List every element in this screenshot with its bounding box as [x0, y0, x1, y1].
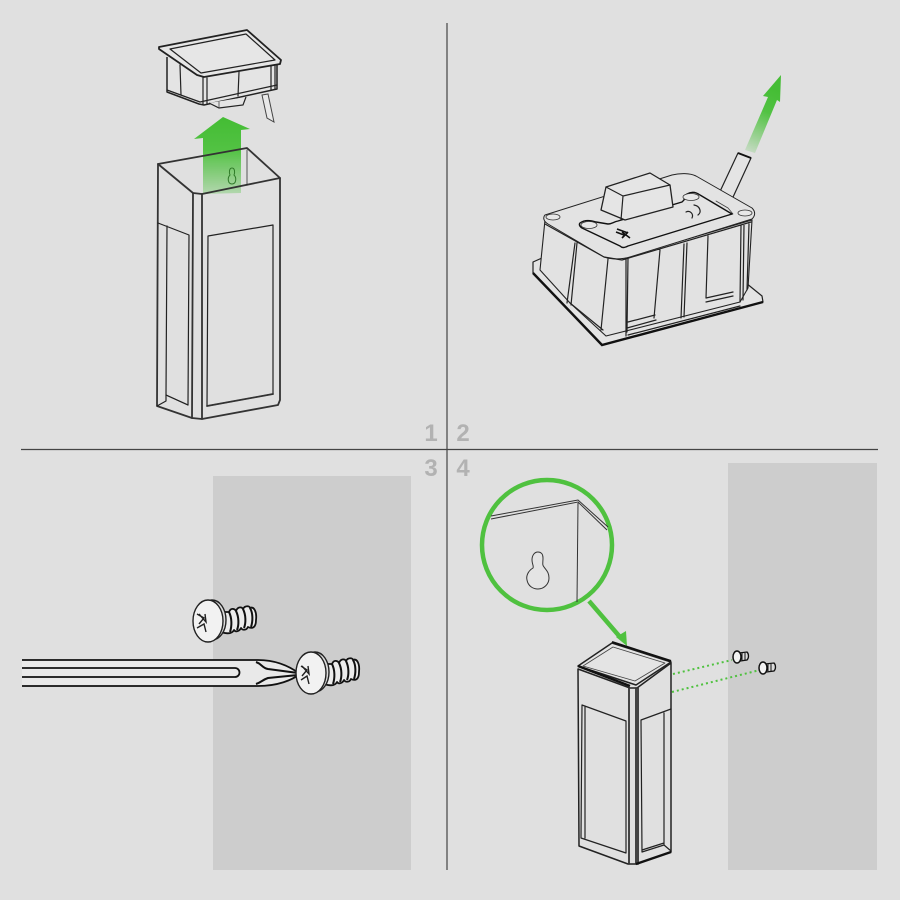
step numbers: 4 [456, 455, 470, 482]
box body [540, 220, 752, 336]
dotted guide lines [672, 660, 760, 692]
green pointer arrow [589, 601, 620, 637]
panel 1: lantern and lifted insert [157, 30, 281, 419]
top plate [544, 174, 755, 259]
step numbers [424, 420, 470, 482]
driven screw [296, 652, 359, 694]
keyhole [228, 168, 236, 184]
recessed label [579, 192, 732, 248]
step numbers: 3 [424, 455, 438, 482]
green up arrow [194, 117, 250, 194]
label marks [616, 229, 630, 238]
screwdriver [22, 660, 300, 686]
wall: step 3 [213, 476, 411, 870]
wall: step 4 [728, 463, 877, 870]
magnified circle detail [482, 480, 612, 610]
panel 2: insert underside [533, 75, 781, 345]
lantern housing [157, 148, 280, 419]
panel 3: screws and screwdriver [22, 600, 359, 694]
loose screw [193, 600, 256, 642]
panel 4: wall mounting [482, 480, 776, 864]
small screws [733, 651, 776, 674]
cover block [601, 173, 673, 220]
step numbers: 2 [456, 420, 470, 447]
green angled arrow [745, 75, 781, 153]
lantern mounted view [578, 642, 671, 864]
pull tab [716, 153, 751, 208]
ribs [545, 222, 751, 336]
step numbers: 1 [424, 420, 438, 447]
solar insert lifted out [159, 30, 281, 122]
base plate [533, 250, 763, 345]
